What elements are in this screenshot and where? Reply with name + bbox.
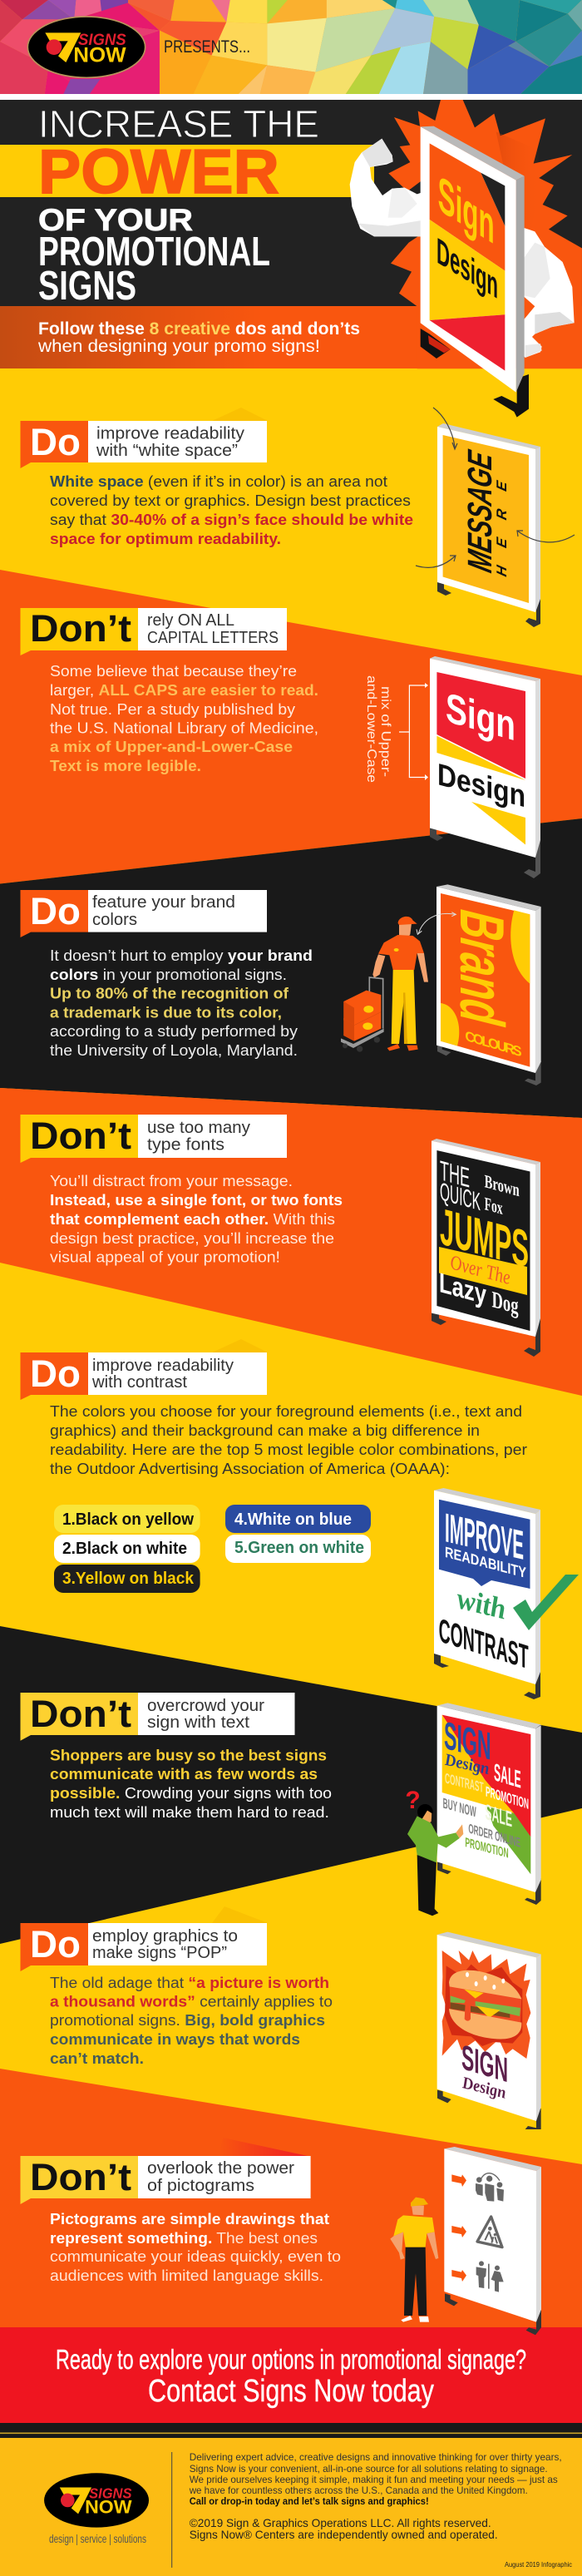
tag: Do	[30, 1923, 81, 1965]
footer copyright	[190, 2516, 498, 2541]
illustration: sign design sign	[430, 656, 540, 878]
cart with boxes	[341, 977, 384, 1052]
tag	[20, 408, 268, 468]
crowded sign: SIGN	[444, 1713, 491, 1769]
tag: type fonts	[147, 1136, 224, 1155]
header logo: Signs Now: SIGNS	[78, 32, 126, 49]
body text: covered by text or graphics. Design best practices	[50, 492, 411, 509]
body text	[50, 663, 318, 774]
tag	[20, 607, 287, 655]
illustration: mixed fonts sign	[432, 1139, 540, 1357]
color combination pills: 2.Black on white	[62, 1540, 187, 1558]
body text: larger, ALL CAPS are easier to read.	[50, 682, 318, 699]
illustration: mixed fonts sign: Lazy	[439, 1268, 486, 1311]
illustration: man with cart and brand sign	[341, 884, 541, 1085]
body text	[50, 1975, 333, 2067]
bracket annotation: mix of Upper-	[378, 686, 392, 777]
body text: communicate with as few words as	[50, 1766, 318, 1782]
body text: design best practice, you’ll increase the	[50, 1230, 334, 1247]
delivery man	[372, 917, 428, 1051]
hero sign with flexing arms	[350, 126, 575, 418]
tag: improve readability	[96, 424, 244, 443]
illustration: burger sign	[437, 1932, 541, 2129]
body text: space for optimum readability.	[50, 531, 281, 547]
illustration: message sign: HERE	[493, 459, 510, 578]
illustration: message sign: MESSAGE	[461, 447, 499, 576]
crowded sign: CONTRAST	[445, 1770, 484, 1796]
body text: a thousand words” certainly applies to	[50, 1994, 333, 2010]
section 7: do, graphics	[20, 1906, 541, 2129]
body text: readability. Here are the top 5 most legible color combinations, per	[50, 1441, 527, 1458]
tag: use too many	[147, 1119, 250, 1137]
hero subtitle: when designing your promo signs!	[37, 337, 320, 356]
body text: The colors you choose for your foreground elements (i.e., text and	[50, 1403, 522, 1420]
color combination pills: 1.Black on yellow	[62, 1510, 194, 1529]
section 2: don't, all caps	[20, 607, 540, 878]
orange arrows	[451, 2174, 466, 2282]
illustration: contrast sign: READABILITY	[445, 1543, 526, 1581]
illustration: pictogram sign and man	[390, 2147, 541, 2335]
tag: employ graphics to	[92, 1927, 238, 1946]
burst behind burger	[442, 1951, 530, 2059]
burger	[449, 1970, 521, 2040]
hero subtitle	[37, 319, 360, 356]
body text: Some believe that because they’re	[50, 663, 297, 680]
hero title: POWER	[38, 136, 279, 206]
tag: Don’t	[30, 2156, 131, 2198]
hero title: INCREASE THE	[38, 102, 319, 146]
body text	[50, 2211, 341, 2284]
tag: Do	[30, 1352, 81, 1395]
brand sign	[436, 884, 541, 1073]
illustration: crowded sign and confused man	[405, 1703, 541, 1916]
tag: make signs “POP”	[92, 1944, 227, 1962]
header logo: Signs Now	[27, 17, 146, 77]
background: diagonal colour bands	[0, 570, 582, 2327]
body text: that complement each other. With this	[50, 1211, 335, 1228]
illustration: message sign	[437, 423, 540, 627]
body text: the U.S. National Library of Medicine,	[50, 720, 318, 737]
section 1: do, white space	[20, 408, 575, 627]
body text: Shoppers are busy so the best signs	[50, 1748, 327, 1764]
illustration: burger sign: Design	[461, 2072, 506, 2103]
hero burst	[388, 100, 582, 368]
body text	[50, 473, 413, 547]
header: low-poly colour mosaic	[0, 0, 582, 95]
body text	[50, 1748, 332, 1821]
footer description: Signs Now is your convenient, all-in-one source for all solutions relating to signage.	[190, 2463, 548, 2475]
footer divider	[171, 2452, 172, 2568]
header divider	[0, 94, 582, 100]
footer description: we have for countless others across the U.S., Canada and the United Kingdom.	[189, 2485, 528, 2496]
tag: with contrast	[91, 1373, 187, 1392]
footer copyright: ©2019 Sign & Graphics Operations LLC. All rights reserved.	[190, 2516, 491, 2529]
crowded sign: PROMOTION	[465, 1835, 509, 1862]
section 3: do, brand colors	[20, 884, 541, 1085]
body text: communicate in ways that words	[50, 2031, 300, 2048]
tag: with “white space”	[96, 442, 238, 460]
call to action band	[0, 2327, 582, 2423]
hero panel	[0, 100, 582, 418]
header: presents label: PRESENTS...	[164, 37, 250, 57]
tag: CAPITAL LETTERS	[147, 629, 279, 647]
footer stripes	[0, 2423, 582, 2438]
illustration: mixed fonts sign: THE	[440, 1156, 470, 1194]
illustration: contrast sign	[434, 1488, 579, 1699]
tag: improve readability	[92, 1357, 234, 1375]
brand sign: Brand	[446, 903, 516, 1033]
illustration: mixed fonts sign: Dog	[492, 1287, 519, 1320]
sign words	[436, 165, 498, 307]
arrow: colours link	[417, 912, 456, 934]
tag	[20, 1906, 268, 1971]
illustration: sign design sign: Design	[437, 757, 525, 813]
left arm	[350, 139, 422, 236]
crowded sign	[437, 1703, 541, 1892]
illustration: mixed fonts sign: QUICK	[440, 1177, 481, 1216]
pictogram: school crossing triangle	[477, 2217, 502, 2247]
sign body	[421, 126, 525, 180]
body text	[50, 1173, 343, 1266]
body text: the University of Loyola, Maryland.	[50, 1042, 298, 1059]
body text: Not true. Per a study published by	[50, 701, 295, 718]
body text: It doesn’t hurt to employ your brand	[50, 947, 313, 964]
body text: possible. Crowding your signs with too	[50, 1785, 332, 1802]
hero title: SIGNS	[38, 264, 136, 309]
body text: communicate your ideas quickly, even to	[50, 2248, 341, 2265]
header logo: Signs Now: NOW	[73, 43, 126, 67]
section 8: don't, pictograms	[20, 2138, 341, 2284]
body text: much text will make them hard to read.	[50, 1804, 329, 1821]
tag: rely ON ALL	[147, 611, 234, 630]
arrows pointing at white space	[416, 408, 575, 567]
tag: colors	[92, 911, 137, 929]
pictogram: group of people	[476, 2173, 504, 2202]
hero subtitle: Follow these 8 creative dos and don’ts	[38, 319, 360, 339]
section 5: do, contrast	[20, 1339, 579, 1699]
icon: green check mark	[513, 1575, 579, 1630]
crowded sign: ORDER ONLINE	[468, 1822, 520, 1851]
tag: Do	[30, 421, 81, 463]
tag: overcrowd your	[147, 1697, 264, 1715]
footer logo	[44, 2473, 149, 2528]
tag	[20, 2138, 311, 2204]
tag	[20, 890, 267, 937]
footer copyright: Signs Now® Centers are independently owned and operated.	[190, 2528, 498, 2541]
tag: Do	[30, 890, 81, 932]
footer date: August 2019 Infographic	[505, 2561, 572, 2569]
sign words: Design	[436, 229, 498, 307]
crowded sign: SALE	[494, 1759, 521, 1794]
footer logo: NOW	[85, 2497, 132, 2518]
body text	[50, 1403, 527, 1477]
tag	[20, 1339, 268, 1400]
footer description: Delivering expert advice, creative designs and innovative thinking for over thirty years,	[190, 2451, 562, 2463]
body text: colors in your promotional signs.	[50, 967, 287, 983]
body text: visual appeal of your promotion!	[50, 1249, 280, 1266]
hero title	[38, 102, 319, 309]
illustration: mixed fonts sign: Fox	[485, 1193, 503, 1219]
illustration: burger sign: SIGN	[461, 2037, 508, 2090]
footer logo: SIGNS	[89, 2485, 132, 2502]
tag: Don’t	[30, 1693, 131, 1735]
color combination pills: 4.White on blue	[234, 1510, 352, 1529]
body text: according to a study performed by	[50, 1023, 298, 1040]
footer description: Call or drop-in today and let’s talk signs and graphics!	[190, 2495, 429, 2507]
hero title: PROMOTIONAL	[38, 230, 270, 274]
crowded sign: BUY NOW	[443, 1795, 476, 1820]
confused man	[405, 1787, 463, 1916]
body text	[50, 947, 313, 1059]
body text: White space (even if it’s in color) is an area not	[50, 473, 387, 490]
body text: say that 30-40% of a sign’s face should be white	[50, 512, 413, 528]
brand sign: COLOURS	[465, 1028, 522, 1060]
illustration: contrast sign: with	[457, 1580, 506, 1626]
section 4: don't, too many fonts	[20, 1115, 540, 1357]
tag	[20, 1693, 294, 1741]
call to action band: Contact Signs Now today	[148, 2374, 434, 2409]
tag: sign with text	[147, 1713, 249, 1732]
tag: Don’t	[30, 1115, 131, 1157]
color combination pills: 3.Yellow on black	[62, 1570, 195, 1588]
color combination pills	[54, 1505, 371, 1593]
hero title: OF YOUR	[38, 202, 193, 237]
body text: a mix of Upper-and-Lower-Case	[50, 739, 293, 755]
body text: You’ll distract from your message.	[50, 1173, 293, 1189]
tag: feature your brand	[92, 893, 235, 912]
section 6: don't, overcrowd	[20, 1693, 541, 1916]
illustration: mixed fonts sign: Brown	[485, 1170, 520, 1200]
footer description	[189, 2451, 562, 2507]
body text: Up to 80% of the recognition of	[50, 985, 289, 1001]
tag: of pictograms	[147, 2177, 254, 2195]
footer description: We pride ourselves keeping it simple, making it fun and meeting your needs — just as	[190, 2474, 558, 2485]
body text: promotional signs. Big, bold graphics	[50, 2012, 325, 2029]
tag: Don’t	[30, 607, 131, 650]
bracket annotation	[364, 675, 428, 783]
crowded sign: PROMOTION	[486, 1783, 529, 1812]
body text: The old adage that “a picture is worth	[50, 1975, 329, 1991]
footer tagline: design | service | solutions	[49, 2532, 146, 2545]
tag: overlook the power	[147, 2159, 294, 2178]
color combination pills: 5.Green on white	[234, 1539, 364, 1557]
body text: graphics) and their background can make a big difference in	[50, 1422, 480, 1439]
man in yellow cap	[390, 2198, 438, 2322]
body text: a trademark is due to its color,	[50, 1005, 282, 1021]
confused man: ?	[405, 1787, 421, 1814]
bracket annotation: and-Lower-Case	[364, 675, 378, 783]
illustration: mixed fonts sign: Over The	[451, 1249, 510, 1289]
sign legs	[421, 329, 529, 418]
body text: represent something. The best ones	[50, 2230, 318, 2247]
right arm	[520, 227, 575, 358]
sign words: Sign	[438, 165, 495, 255]
footer panel	[0, 2438, 582, 2576]
crowded sign: SALE	[485, 1799, 512, 1832]
pictogram: restroom sign	[476, 2261, 504, 2292]
body text: the Outdoor Advertising Association of America (OAAA):	[50, 1461, 450, 1477]
body text: audiences with limited language skills.	[50, 2267, 323, 2284]
body text: Text is more legible.	[50, 758, 201, 774]
tag	[20, 1115, 287, 1163]
body text: Instead, use a single font, or two fonts	[50, 1192, 343, 1209]
illustration: sign design sign: Sign	[446, 684, 515, 749]
crowded sign: Design	[444, 1749, 489, 1778]
body text: can’t match.	[50, 2050, 144, 2067]
body text: Pictograms are simple drawings that	[50, 2211, 329, 2227]
sign legs	[437, 1044, 541, 1085]
